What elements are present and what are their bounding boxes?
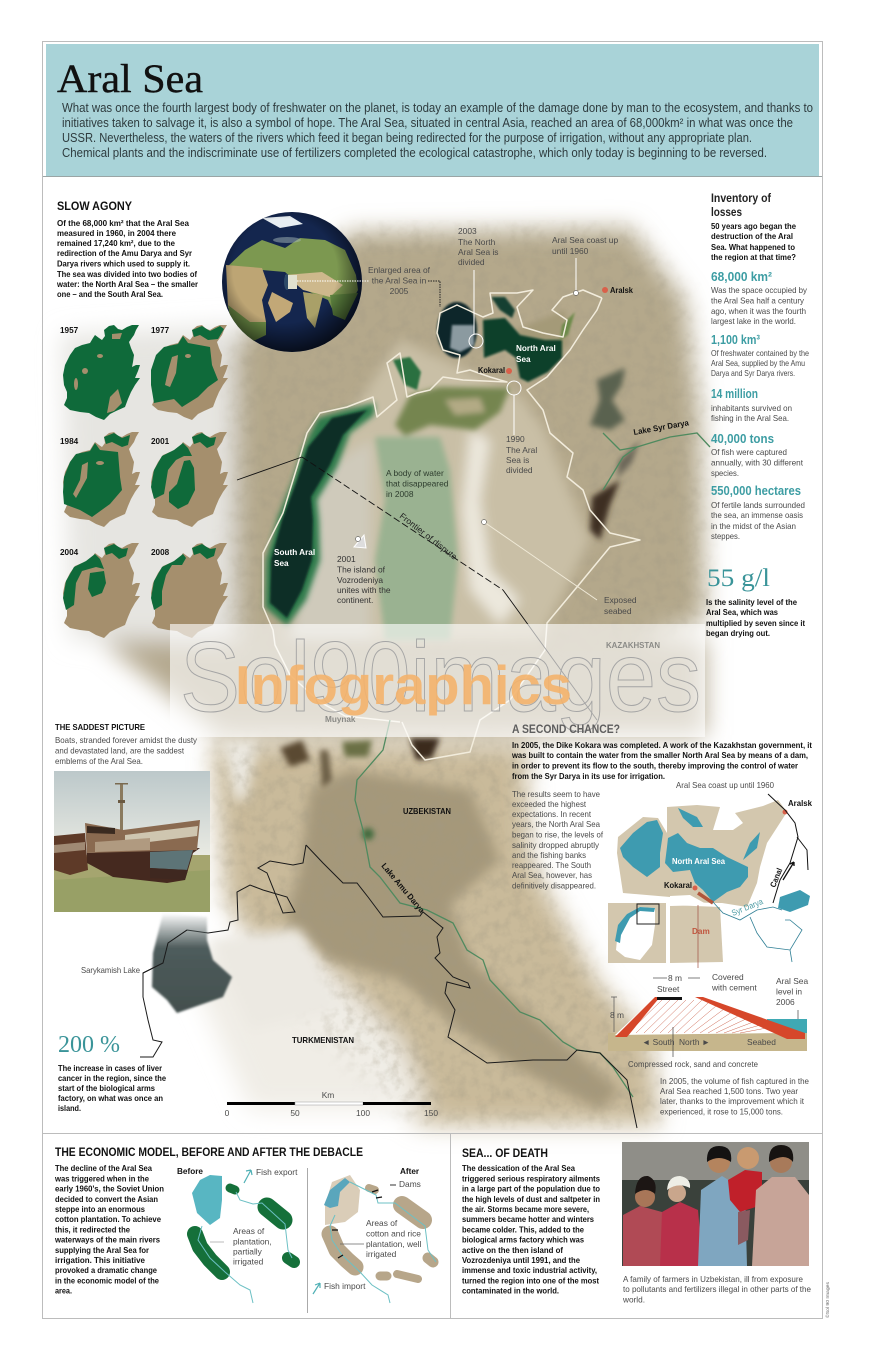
text: fish capture: experienced, it rose to 15,000 tons. <box>660 1106 783 1116</box>
panel: slow agony text: The sea was divided into two bodies of <box>57 270 197 279</box>
small maps: shrinking sea 1957-2008 <box>60 325 228 638</box>
map: north aral sea and dam: Aralsk <box>788 799 812 808</box>
panel: slow agony text: Darya rivers which used to supply it. <box>57 260 190 268</box>
panel: inventory of losses: the region at that time? <box>711 253 796 262</box>
text: results: Aral Sea, however, has <box>512 870 592 880</box>
panel: 200 % statistic: factory, on what was once an <box>58 1094 163 1103</box>
labels: countries and river: Lake Amu Darya <box>379 862 426 915</box>
panel: the economic model <box>54 1147 436 1313</box>
panel: sea of death: triggered serious respiratory ailments <box>462 1174 600 1184</box>
callout: 1990 <box>506 381 537 475</box>
panel: inventory of losses: inhabitants survived on <box>711 403 792 413</box>
sea <box>620 820 663 877</box>
callout: 2003: The North <box>458 237 496 247</box>
map: north aral sea and dam: North Aral Sea <box>672 857 725 866</box>
panel: inventory of losses: in the midst of the Asian <box>711 521 796 531</box>
syr darya <box>713 902 802 962</box>
panel: a second chance: in order to prevent its flow to the south, thereby improving the control of water <box>512 762 799 770</box>
text: results: The results seem to have <box>512 789 600 799</box>
text: results <box>512 789 604 890</box>
text: economic model body: this, it redirected the <box>55 1226 130 1234</box>
panel: 200 % statistic: cancer in the region, since the <box>58 1074 166 1083</box>
text: economic model body: cotton plantation. To achieve <box>55 1215 161 1224</box>
panel: 200 % statistic: The increase in cases of liver <box>58 1064 163 1073</box>
callout: 2001: 2001 <box>337 554 356 564</box>
north aral sea <box>393 297 575 390</box>
text: economic model body: steppe into an enormous <box>55 1205 145 1214</box>
panel: slow agony text: SLOW AGONY <box>57 201 132 213</box>
scale bar: 100 <box>356 1108 370 1118</box>
panel: inventory of losses: 550,000 hectares <box>711 484 801 498</box>
panel: inventory of losses: losses <box>711 205 742 219</box>
panel: inventory of losses <box>711 191 809 541</box>
panel: sea of death: turned the region into one of the most <box>462 1276 599 1286</box>
dam <box>698 893 713 903</box>
panel: sea of death: became colder. This, added to the <box>462 1226 584 1234</box>
map 2004: 2004 <box>60 548 79 557</box>
label: Aralsk: Aralsk <box>610 286 633 295</box>
panel: a second chance: In 2005, the Dike Kokara was completed. A work of the Kazakhstan government, it <box>512 741 812 750</box>
diagram: after <box>313 1167 436 1303</box>
label: disappeared body of water: A body of water <box>386 468 444 478</box>
map 1977: 1977 <box>151 326 170 335</box>
panel: inventory of losses: 68,000 km² <box>711 270 772 284</box>
panel: sea of death: biological arms factory which was <box>462 1236 584 1244</box>
scale bar: 0 <box>225 1108 230 1118</box>
text: fish capture: Aral Sea reached 1,500 tons. Two year <box>660 1086 798 1096</box>
scale bar: 50 <box>290 1108 300 1118</box>
callout: 2003: Aral Sea is <box>458 247 498 257</box>
panel: a second chance: A SECOND CHANCE? <box>512 724 620 736</box>
panel: slow agony text: Of the 68,000 km² that the Aral Sea <box>57 219 189 228</box>
panel: 200 % statistic <box>58 1032 166 1113</box>
photo caption <box>622 1274 811 1304</box>
sarykamish lake <box>81 913 232 1013</box>
diagram: before: Areas of <box>233 1226 265 1236</box>
panel: inventory of losses: largest lake in the world. <box>711 316 796 326</box>
callout: coast until 1960 <box>552 235 618 296</box>
text: results: years, the North Aral Sea <box>512 819 600 829</box>
callout: 2001: Vozrodeniya <box>337 575 383 585</box>
panel: inventory of losses: the Aral Sea half a century <box>711 296 805 306</box>
sarykamish lake: Sarykamish Lake <box>81 965 140 975</box>
panel: sea of death: in a large part of the population due to <box>462 1184 600 1194</box>
map 2001: 2001 <box>151 437 170 446</box>
text: economic model body: area. <box>55 1286 72 1296</box>
label: Lake Syr Darya: Lake Syr Darya <box>633 418 690 437</box>
panel: 200 % statistic: 200 % <box>58 1032 120 1058</box>
labels: Kazakhstan, Muynak <box>325 641 660 724</box>
scale bar: 150 <box>424 1108 438 1118</box>
panel: inventory of losses: Darya and Syr Darya rivers. <box>711 368 795 378</box>
map 2008 <box>151 543 228 638</box>
label: North Aral Sea: Sea <box>516 355 531 364</box>
map 1957 <box>60 325 140 420</box>
text: fish capture: In 2005, the volume of fish captured in the <box>660 1076 809 1086</box>
text: economic model body: early 1960's, the Soviet Union <box>55 1184 164 1194</box>
panel: 200 % statistic: island. <box>58 1104 81 1113</box>
panel: salinity statistic: multiplied by seven since it <box>706 619 805 628</box>
map: north aral sea and dam: Syr Darya <box>730 896 765 918</box>
map 1984 <box>60 432 140 527</box>
intro paragraph: initiatives taken to salvage it, is also a symbol of hope. The Aral Sea, situated in central Asia, reached an area of 68,000km² in what was once the <box>62 116 793 130</box>
map: north aral sea and dam: Canal <box>769 867 784 889</box>
map labels and callouts <box>274 226 690 616</box>
callout: 2001: continent. <box>337 595 373 605</box>
panel: inventory of losses: the sea, an immense oasis <box>711 510 803 520</box>
photo caption: A family of farmers in Uzbekistan, ill from exposure <box>623 1274 803 1284</box>
photo caption: world. <box>622 1294 645 1304</box>
panel: the economic model: THE ECONOMIC MODEL, BEFORE AND AFTER THE DEBACLE <box>55 1147 363 1159</box>
diagram: dam cross-section: Aral Sea <box>776 976 808 986</box>
text: economic model body <box>54 1164 164 1296</box>
label: disappeared body of water: that disappeared <box>386 478 449 488</box>
panel: a second chance: from the Syr Darya in its use for irrigation. <box>512 772 665 781</box>
text: economic model body: supplying the Aral Sea for <box>55 1246 150 1255</box>
text: fish capture: later, thanks to the improvement which it <box>660 1096 805 1106</box>
panel: a second chance: was built to contain the water from the smaller North Aral Sea by means of a dam, <box>511 751 808 760</box>
callout: exposed seabed: seabed <box>604 606 632 616</box>
panel: inventory of losses: ago, when it was the fourth <box>711 306 806 316</box>
main map: Aral Sea water bodies and coast <box>237 290 710 1097</box>
panel: slow agony text: redirection of the Amu Darya and Syr <box>57 249 193 258</box>
panel: inventory of losses: 50 years ago began the <box>711 222 796 231</box>
panel: salinity statistic: Aral Sea, which was <box>706 608 778 617</box>
photo: stranded ship <box>54 771 210 912</box>
rivers <box>355 433 710 1097</box>
diagram: dam cross-section: with cement <box>711 982 757 992</box>
diagram: dam cross-section <box>608 972 808 1069</box>
panel: the saddest picture: Boats, stranded forever amidst the dusty <box>55 735 198 745</box>
callout: coast until 1960: until 1960 <box>552 246 589 256</box>
map: north aral sea and dam: Aral Sea coast up until 1960 <box>676 780 774 790</box>
panel: slow agony text: remained 17,240 km², due to the <box>57 239 175 248</box>
callout: 1990: Sea is <box>506 455 529 465</box>
map 2004 <box>60 543 140 638</box>
panel: slow agony text: water: the North Aral Sea – the smaller <box>56 280 199 289</box>
diagram: after: After <box>400 1167 420 1176</box>
diagram: before: plantation, <box>233 1236 272 1246</box>
label: disappeared body of water <box>386 468 449 499</box>
callout: 2003: divided <box>458 257 485 267</box>
panel: sea of death: Vozrozdeniya until 1991, and the <box>462 1256 580 1265</box>
callout: enlarged area: Enlarged area of <box>368 265 431 275</box>
map: north aral sea and dam <box>608 780 812 968</box>
callout: 2003 <box>458 226 498 348</box>
panel: inventory of losses: destruction of the Aral <box>711 232 793 241</box>
diagram: dam cross-section: Covered <box>712 972 744 982</box>
text: results: exceeded the highest <box>512 799 587 809</box>
labels: countries and river: UZBEKISTAN <box>403 807 451 816</box>
island of Vozrozdeniya <box>354 535 366 548</box>
title: Aral Sea <box>57 56 203 101</box>
credit: ©Sol 90 Images <box>824 1281 830 1318</box>
panel: sea of death: active on the then island of <box>462 1246 563 1255</box>
callout: 2001: The island of <box>337 564 386 574</box>
panel: sea of death: SEA... OF DEATH <box>462 1148 548 1160</box>
text: results: definitively disappeared. <box>512 880 596 890</box>
photo caption: to pollutants and fertilizers illegal in other parts of the <box>623 1284 811 1294</box>
map 2008: 2008 <box>151 548 170 557</box>
label: disappeared body of water: in 2008 <box>386 489 414 499</box>
panel: slow agony text: one – and the South Aral Sea. <box>57 290 163 299</box>
diagram: after: irrigated <box>366 1249 397 1259</box>
diagram: after: plantation, well <box>366 1239 422 1249</box>
text: results: and the fishing banks <box>512 850 586 860</box>
panel: inventory of losses: annually, with 30 different <box>711 458 804 468</box>
panel: the saddest picture: emblems of the Aral Sea. <box>55 756 143 766</box>
callout: enlarged area: 2005 <box>390 286 409 296</box>
callout: enlarged area <box>297 265 440 307</box>
intro paragraph <box>62 101 813 160</box>
inset locator map <box>608 903 666 963</box>
label: North Aral Sea: North Aral <box>516 344 556 353</box>
watermark band: Infographics <box>235 654 572 716</box>
diagram: before: Fish export <box>256 1167 298 1177</box>
map background: satellite terrain <box>60 220 720 1130</box>
label: South Aral Sea: South Aral <box>274 548 315 557</box>
text: economic model body: provoked a dramatic change <box>55 1266 157 1275</box>
text: economic model body: waterways of the main rivers <box>54 1236 160 1244</box>
intro paragraph: Chemical plants and the indiscriminate use of fertilizers completed the ecological catastrophe, which only today is beginning to be reversed. <box>62 146 767 160</box>
diagram: dam cross-section: Street <box>657 984 680 994</box>
map: north aral sea and dam: Kokaral <box>664 881 692 890</box>
map 1957: 1957 <box>60 326 79 335</box>
panel: inventory of losses: fishing in the Aral Sea. <box>711 413 789 423</box>
globe <box>222 212 362 352</box>
panel: inventory of losses: Inventory of <box>711 191 772 205</box>
map 2001 <box>151 432 228 527</box>
panel: inventory of losses: Of fertile lands surrounded <box>711 500 805 510</box>
land <box>617 800 787 907</box>
diagram: dam cross-section: 2006 <box>776 997 795 1007</box>
diagram: dam cross-section: 8 m <box>610 1010 624 1020</box>
diagram: dam cross-section: Seabed <box>747 1037 776 1047</box>
text: fish capture <box>660 1076 809 1116</box>
label: South Aral Sea: Sea <box>274 559 289 568</box>
diagram: before: irrigated <box>233 1256 264 1266</box>
panel: slow agony text: measured in 1960, in 2004 there <box>57 229 176 238</box>
callout: exposed seabed: Exposed <box>604 595 637 605</box>
map: north aral sea and dam: Dam <box>692 927 710 936</box>
map 1977 <box>151 325 228 420</box>
panel: sea of death: contaminated in the world. <box>462 1286 559 1296</box>
coast line up to 1960 <box>263 290 640 760</box>
diagram: before <box>177 1167 298 1303</box>
diagram: before: Before <box>177 1167 203 1176</box>
panel: sea of death: the air. Storms became more severe, <box>462 1205 589 1214</box>
panel: inventory of losses: Sea. What happened to <box>711 243 795 252</box>
diagram: dam cross-section: level in <box>776 986 802 996</box>
label: frontier of dispute: Frontier of dispute <box>398 511 459 562</box>
panel: inventory of losses: Was the space occupied by <box>711 285 808 295</box>
panel: salinity statistic: began drying out. <box>706 629 770 638</box>
callout: 2003: 2003 <box>458 226 477 236</box>
diagram: after: cotton and rice <box>366 1228 421 1238</box>
text: results: began to rise, the levels of <box>512 830 604 840</box>
text: results: salinity dropped abruptly <box>512 840 600 850</box>
panel: the saddest picture: and devastated land, are the saddest <box>55 746 185 756</box>
south aral sea <box>265 403 375 626</box>
panel: inventory of losses: Aral Sea, supplied by the Amu <box>711 358 805 368</box>
panel: sea of death: summers became hotter and winters <box>462 1215 594 1224</box>
callout: 1990: divided <box>506 465 533 475</box>
panel: salinity statistic: Is the salinity level of the <box>706 598 797 607</box>
panel: the saddest picture: THE SADDEST PICTURE <box>55 723 146 732</box>
label: North Aral Sea <box>516 344 556 364</box>
diagram: dam cross-section: ◄ South <box>642 1037 675 1047</box>
diagram: after: Fish import <box>324 1281 366 1291</box>
map 1984: 1984 <box>60 437 79 446</box>
diagram: dam cross-section: 8 m <box>668 973 682 983</box>
text: economic model body: irrigation. This initiative <box>55 1256 145 1265</box>
labels: Kazakhstan, Muynak: Muynak <box>325 715 356 724</box>
labels: Kazakhstan, Muynak: KAZAKHSTAN <box>606 641 660 650</box>
frontier of dispute line <box>237 457 597 720</box>
scale bar: Km <box>322 1090 334 1100</box>
panel: the saddest picture <box>54 723 210 912</box>
panel: a second chance <box>511 724 812 1116</box>
aralsk and canal <box>782 810 788 814</box>
panel: 200 % statistic: start of the biological arms <box>58 1084 155 1093</box>
panel: sea of death: the high levels of dust and saltpeter in <box>462 1195 600 1204</box>
text: economic model body: in the economic model of the <box>55 1276 159 1286</box>
labels: countries and river <box>292 807 451 1045</box>
panel: slow agony text <box>56 201 199 299</box>
text: results: expectations. In recent <box>512 809 592 819</box>
callout: enlarged area: the Aral Sea in <box>372 276 427 286</box>
callout: 2001 <box>337 554 391 605</box>
callout: 2001: unites with the <box>337 585 391 595</box>
intro paragraph: What was once the fourth largest body of freshwater on the planet, is today an example of the damage done by man to the ecosystem, and thanks to <box>62 101 813 115</box>
scale bar <box>225 1090 438 1118</box>
text: results: reappeared. The South <box>512 860 591 870</box>
panel: salinity statistic <box>706 565 805 638</box>
labels: countries and river: TURKMENISTAN <box>292 1036 354 1045</box>
panel: inventory of losses: 1,100 km³ <box>711 333 760 347</box>
callout: exposed seabed <box>482 520 637 616</box>
diagram: dam cross-section: Compressed rock, sand and concrete <box>628 1059 758 1069</box>
header band <box>46 44 819 176</box>
photo: family of farmers <box>622 1142 809 1266</box>
panel: inventory of losses: Of freshwater contained by the <box>711 348 809 358</box>
callout: 1990: The Aral <box>506 445 537 455</box>
text: economic model body: The decline of the Aral Sea <box>55 1164 152 1173</box>
label: South Aral Sea <box>274 548 315 568</box>
diagram: dam cross-section: North ► <box>679 1037 710 1047</box>
panel: inventory of losses: steppes. <box>711 531 740 541</box>
panel: sea of death: The dessication of the Aral Sea <box>462 1164 575 1173</box>
intro paragraph: USSR. Nevertheless, the waters of the rivers which feed it began being redirected for the purpose of irrigation, without any appropriate plan. <box>62 131 752 145</box>
callout: coast until 1960: Aral Sea coast up <box>552 235 618 245</box>
diagram: before: partially <box>233 1246 263 1256</box>
panel: inventory of losses: 40,000 tons <box>711 432 774 446</box>
map borders <box>140 845 637 1128</box>
panel: sea of death: immense and toxic industrial activity, <box>462 1266 597 1275</box>
panel: sea of death <box>462 1148 600 1296</box>
panel: inventory of losses: 14 million <box>711 387 758 401</box>
text: economic model body: decided to convert the Asian <box>55 1195 158 1204</box>
watermark band: Sol90images <box>180 621 701 732</box>
diagram: after: Dams <box>399 1179 421 1189</box>
label: Kokaral: Kokaral <box>478 366 505 375</box>
panel: inventory of losses: Of fish were captured <box>711 447 787 457</box>
callout: 1990: 1990 <box>506 434 525 444</box>
text: economic model body: was triggered when in the <box>54 1174 149 1184</box>
diagram: after: Areas of <box>366 1218 398 1228</box>
panel: inventory of losses: species. <box>711 468 739 478</box>
panel: salinity statistic: 55 g/l <box>707 565 770 592</box>
